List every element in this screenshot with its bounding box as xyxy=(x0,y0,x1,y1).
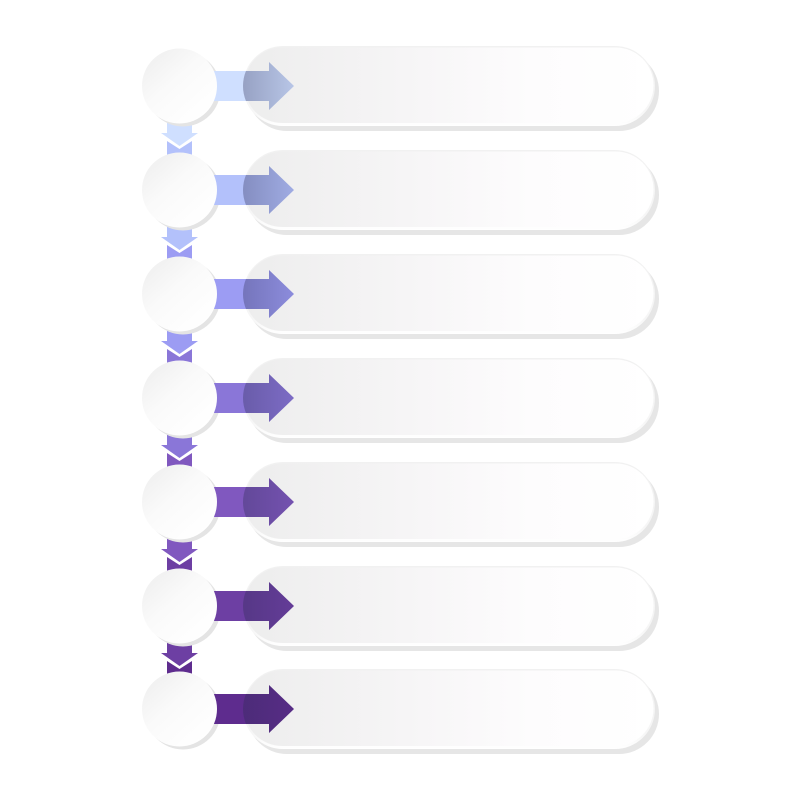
connector 5 to 6 xyxy=(161,536,198,572)
connector 3 to 4 xyxy=(161,328,198,364)
row 5 xyxy=(142,462,659,547)
arrow 6 xyxy=(212,582,294,630)
process diagram xyxy=(142,46,659,754)
connector 2 to 3 xyxy=(161,224,198,260)
row 4 xyxy=(142,358,659,443)
connector 4 to 5 xyxy=(161,432,198,468)
arrow 2 xyxy=(212,166,294,214)
arrow 7 xyxy=(212,685,294,733)
connector 1 to 2 xyxy=(161,120,198,156)
row 1 xyxy=(142,46,659,131)
arrow 1 xyxy=(212,62,294,110)
arrow 5 xyxy=(212,478,294,526)
row 7 xyxy=(142,669,659,754)
connector 6 to 7 xyxy=(161,640,198,676)
row 3 xyxy=(142,254,659,339)
arrow 4 xyxy=(212,374,294,422)
row 6 xyxy=(142,566,659,651)
arrow 3 xyxy=(212,270,294,318)
row 2 xyxy=(142,150,659,235)
